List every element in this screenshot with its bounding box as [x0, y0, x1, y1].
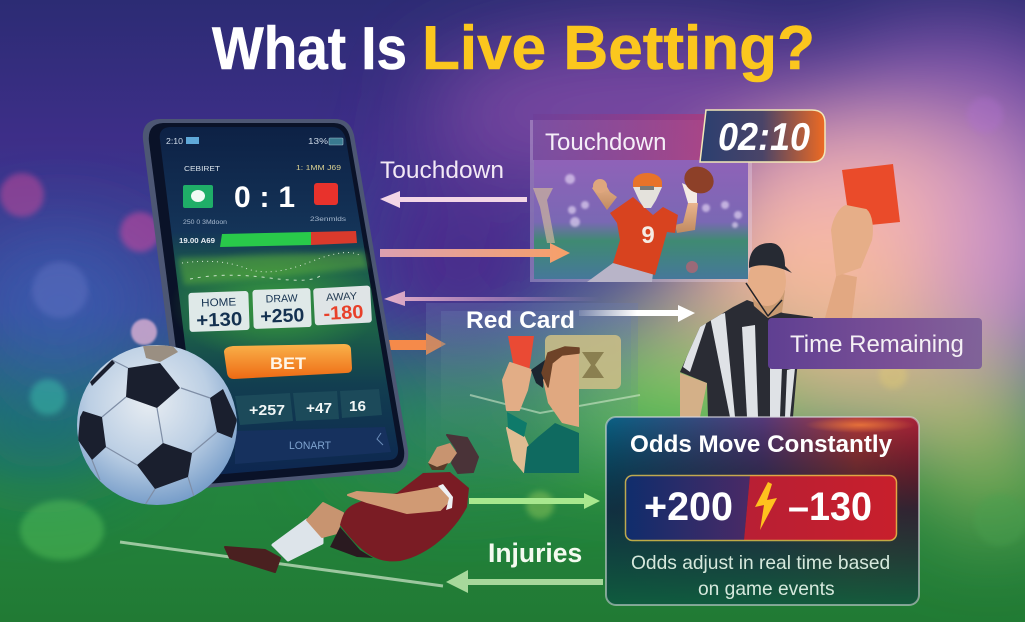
scoreboard: 0 : 1 — [234, 181, 295, 214]
mini field graphic — [178, 252, 368, 285]
scoreboard: 23enmlds — [310, 217, 346, 223]
odds: draw — [252, 288, 312, 329]
arrow: pink back to phone — [384, 291, 600, 306]
odds: draw: DRAW — [265, 292, 298, 306]
odds: away: -180 — [323, 302, 364, 325]
heading: Odds Move Constantly — [630, 431, 893, 458]
arrow: white to referee — [579, 305, 695, 322]
small odds row: +47 — [306, 400, 332, 417]
timer badge: 02:10 — [718, 116, 810, 159]
odds pill — [625, 475, 897, 540]
figure: man with red card — [503, 336, 579, 473]
label: Red Card: Red Card — [466, 307, 575, 334]
icon: lightning — [755, 482, 777, 530]
bet button — [224, 344, 352, 379]
phone screen — [160, 127, 398, 475]
panel: red card scene — [426, 303, 640, 493]
figure: quarterback — [587, 162, 718, 282]
description: Odds adjust in real time based — [631, 553, 890, 574]
scoreboard: 250 0 3Mdoon — [183, 220, 227, 226]
figure: main referee — [680, 164, 900, 417]
title: Live Betting? — [422, 14, 815, 83]
arrow: orange to touchdown panel — [380, 243, 570, 263]
small odds row: +257 — [249, 402, 285, 419]
arrow: orange to red card panel — [388, 333, 446, 355]
odds: draw: +250 — [260, 305, 305, 328]
icon: raised hand in background — [533, 188, 555, 243]
status bar: 2:10 — [166, 137, 184, 146]
hourglass card — [545, 335, 621, 389]
timer badge — [700, 110, 825, 162]
arrow: green back — [446, 570, 603, 593]
label: Touchdown: Touchdown — [380, 157, 504, 184]
panel: touchdown photo — [530, 114, 752, 282]
panel: odds move constantly: on game events — [698, 579, 835, 600]
small odds row: 16 — [349, 398, 366, 415]
arrow: pink touchdown arrow to phone — [380, 191, 527, 208]
odds pill: +200 — [644, 485, 733, 529]
odds: home — [188, 291, 250, 332]
label: Injuries: Injuries — [488, 538, 582, 568]
small odds row — [235, 389, 382, 425]
title: What Is — [212, 15, 407, 82]
callout: Time Remaining: Time Remaining — [790, 331, 964, 358]
figure: injured player — [225, 435, 478, 572]
panel: odds move constantly — [606, 417, 919, 605]
odds: home: HOME — [201, 296, 236, 310]
bottom nav — [235, 427, 391, 464]
odds: home: +130 — [196, 309, 243, 332]
title — [212, 14, 815, 83]
momentum bar — [179, 231, 357, 247]
odds: away: AWAY — [326, 290, 357, 304]
scoreboard: CEBIRET — [184, 164, 220, 173]
status bar — [166, 137, 343, 146]
arrow: green to odds panel — [469, 493, 600, 509]
bottom nav: LONART — [289, 440, 331, 452]
odds: away — [313, 286, 372, 325]
scoreboard — [183, 163, 346, 226]
status bar: 13% — [308, 137, 328, 146]
callout: Time Remaining — [768, 318, 982, 369]
soccer ball — [77, 345, 237, 505]
momentum bar: 19.00 A69 — [179, 236, 215, 245]
odds pill: –130 — [788, 485, 872, 529]
phone — [143, 119, 408, 488]
heading: touchdown: Touchdown — [545, 129, 666, 156]
bet button: BET — [270, 354, 307, 373]
figure: quarterback: 9 — [641, 222, 655, 249]
scoreboard: 1: 1MM J69 — [296, 163, 341, 172]
